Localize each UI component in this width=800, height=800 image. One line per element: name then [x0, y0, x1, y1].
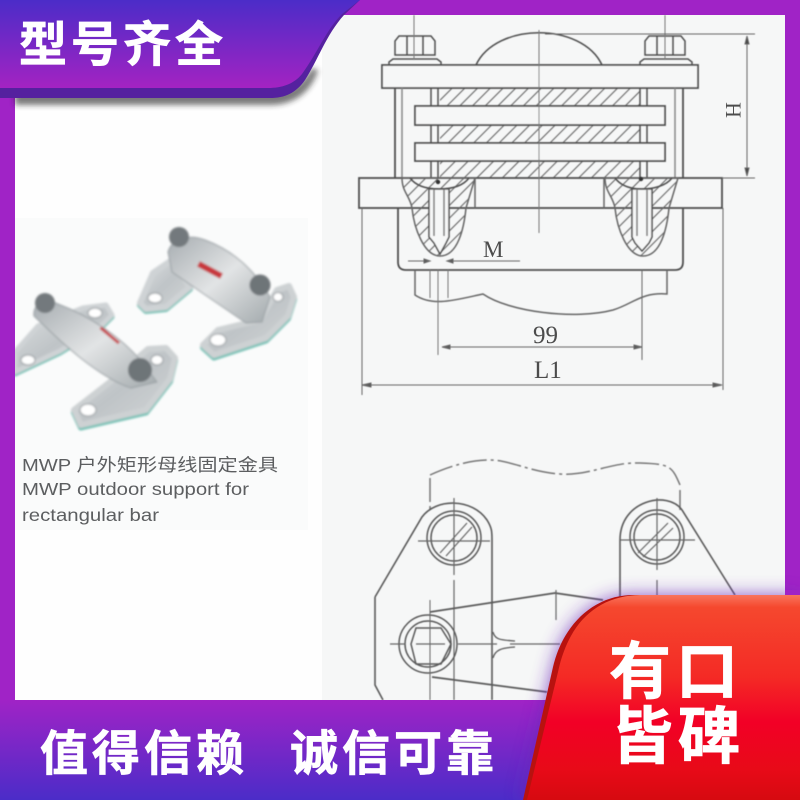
bolts and nuts	[389, 36, 692, 178]
broken conductor outline	[415, 270, 667, 314]
technical drawing: side section view	[359, 15, 755, 395]
left tab outline	[375, 503, 492, 700]
bottom slogan: 值得信赖	[40, 728, 248, 781]
product photo: MWP fittings	[15, 227, 294, 428]
clamp body and base plate	[359, 88, 722, 270]
dimension labels: 99	[533, 322, 558, 349]
top badge	[0, 0, 360, 98]
technical drawing: plan view	[375, 460, 735, 700]
dome and top plate	[382, 33, 698, 88]
bottom slogan right: 诚信可靠	[290, 728, 498, 781]
red panel shadow	[521, 595, 800, 800]
arm with hexagon bolt	[390, 590, 603, 700]
threaded holes with hatching	[402, 177, 678, 256]
dimension L1	[362, 208, 723, 395]
copper bars	[415, 106, 665, 161]
dimension M	[408, 259, 520, 263]
photo caption: rectangular bar	[22, 505, 159, 525]
red panel lip	[523, 595, 700, 800]
photo caption	[22, 455, 278, 525]
dimension 99	[442, 270, 642, 360]
right screw	[620, 498, 695, 600]
photo caption: MWP 户外矩形母线固定金具	[22, 455, 278, 475]
hatched insulation layers	[440, 88, 640, 178]
red panel text line 2: 皆碑	[611, 703, 745, 772]
dimension labels	[483, 102, 746, 384]
right tab outline	[620, 500, 735, 600]
red panel	[527, 595, 800, 800]
dash-dot conductor outline	[430, 460, 680, 510]
left screw	[418, 498, 490, 700]
left fitting	[15, 293, 175, 428]
centre lines	[414, 15, 665, 355]
dimension labels: L1	[534, 357, 562, 384]
purple frame right strip above red panel	[785, 590, 800, 600]
red panel text line 1: 有口	[609, 638, 743, 707]
dimension H	[545, 34, 755, 178]
dimension labels: H	[721, 102, 746, 118]
right fitting	[140, 227, 294, 358]
badge title: 型号齐全	[19, 19, 227, 72]
bottom band	[0, 700, 540, 800]
photo caption: MWP outdoor support for	[22, 479, 249, 499]
dimension labels: M	[483, 237, 503, 262]
top badge shadow	[15, 68, 318, 105]
